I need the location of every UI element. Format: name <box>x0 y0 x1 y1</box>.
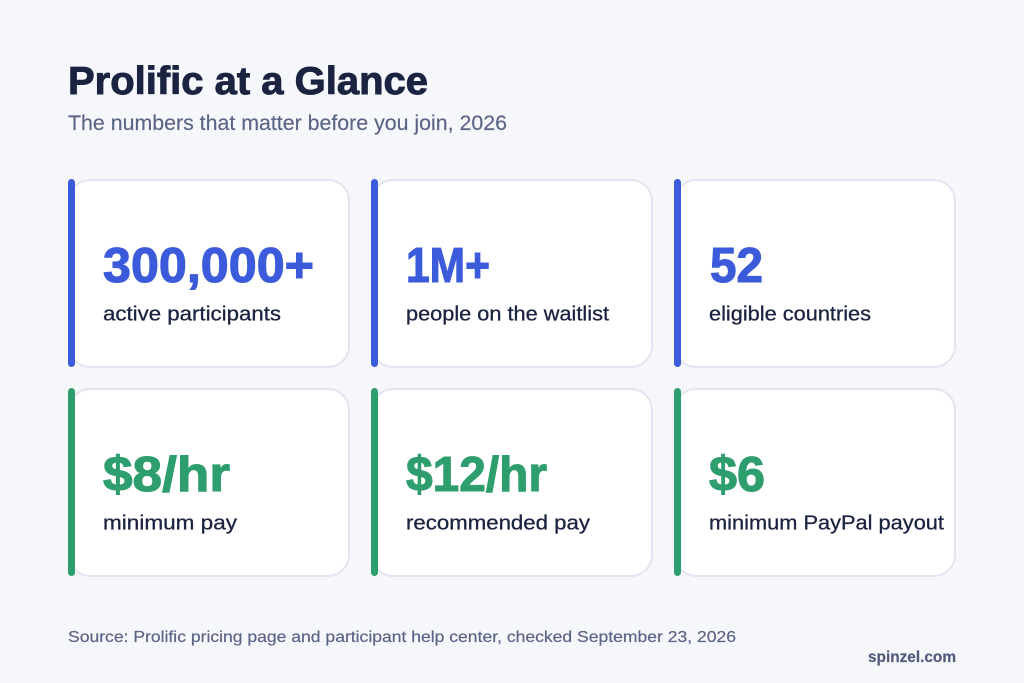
panel: active participants: active participants <box>103 302 281 326</box>
panel: active participants: 300,000+ <box>103 239 314 293</box>
panel: eligible countries <box>674 179 955 367</box>
panel: waitlist: people on the waitlist <box>406 302 609 326</box>
panel: waitlist <box>371 179 652 367</box>
brand: spinzel.com: spinzel.com <box>868 649 956 666</box>
panel: minimum pay <box>68 388 349 576</box>
panel: minimum PayPal payout: minimum PayPal payout <box>709 512 944 534</box>
panel: minimum PayPal payout: $6 <box>709 448 765 502</box>
panel: minimum pay: $8/hr <box>103 448 230 502</box>
panel: eligible countries: 52 <box>710 239 763 293</box>
panel: recommended pay <box>371 388 652 576</box>
panel: active participants <box>68 179 349 367</box>
panel: minimum pay: minimum pay <box>103 512 238 534</box>
source note: Source: Prolific pricing page and participant help center, checked September 23, 2026 <box>68 629 736 646</box>
panel: eligible countries: eligible countries <box>709 302 871 326</box>
title: Prolific at a Glance <box>68 60 428 103</box>
panel: waitlist: 1M+ <box>406 239 490 293</box>
subtitle: The numbers that matter before you join, 2026 <box>68 112 507 135</box>
panel: recommended pay: $12/hr <box>406 448 547 502</box>
panel: minimum PayPal payout <box>674 388 955 576</box>
panel: recommended pay: recommended pay <box>406 512 591 534</box>
